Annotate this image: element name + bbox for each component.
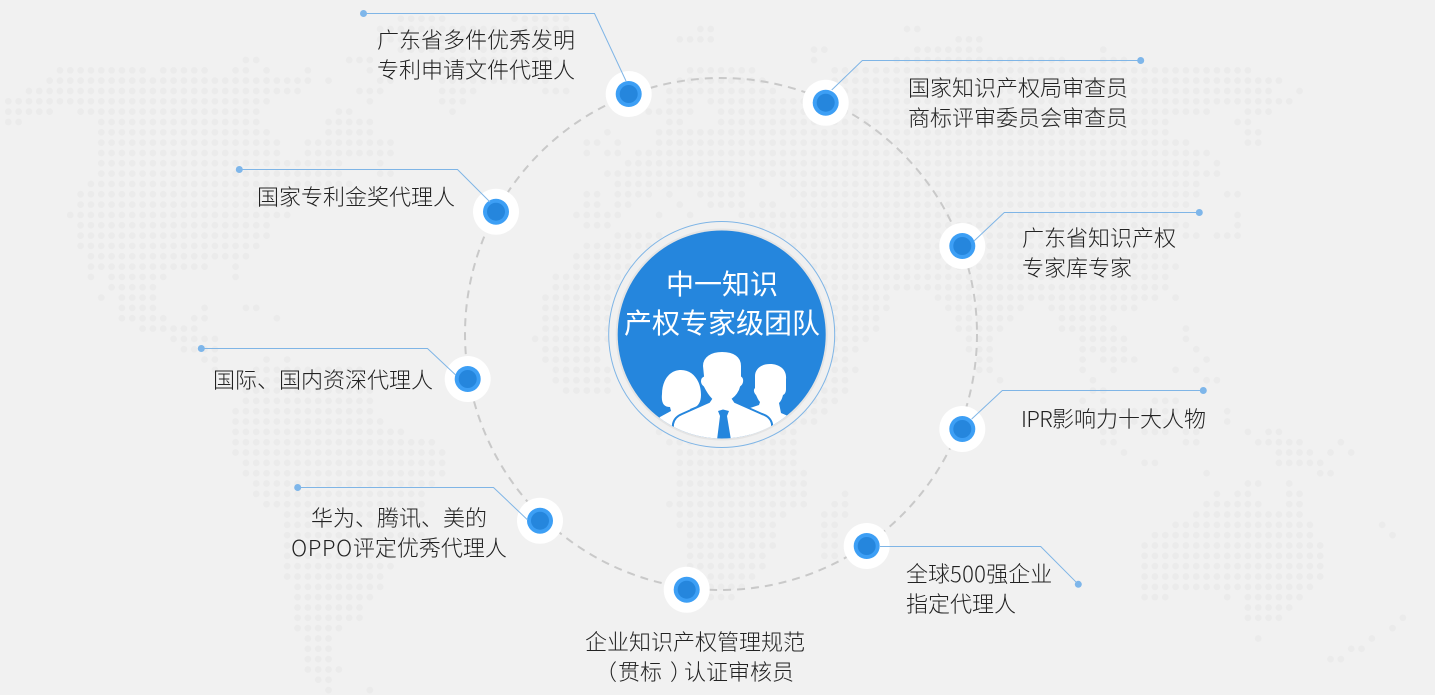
badge subheading: 产权专家级团队 xyxy=(624,308,820,339)
label: CNIPA examiner: 商标评审委员会审查员 xyxy=(908,106,1128,131)
node 5 xyxy=(445,356,491,402)
node 3 xyxy=(473,189,519,235)
badge heading: 中一知识 xyxy=(666,269,778,300)
node 4 xyxy=(939,223,985,269)
label: CNIPA examiner xyxy=(908,76,1128,131)
label: provincial expert xyxy=(1022,226,1176,281)
label: CNIPA examiner: 国家知识产权局审查员 xyxy=(908,76,1128,101)
label: standard auditor: （贯标 ）认证审核员 xyxy=(595,660,794,685)
label: senior agent: 国际、国内资深代理人 xyxy=(213,368,433,393)
label: standard auditor xyxy=(585,630,805,685)
label: invention patent agent: 专利申请文件代理人 xyxy=(377,58,575,83)
label: invention patent agent xyxy=(377,28,575,83)
node 6 xyxy=(939,406,985,452)
label: provincial expert: 专家库专家 xyxy=(1022,256,1132,281)
node 8 xyxy=(844,523,890,569)
icon: three people silhouettes xyxy=(660,352,787,438)
node 7 xyxy=(517,498,563,544)
label: standard auditor: 企业知识产权管理规范 xyxy=(585,630,805,655)
label: excellent agent: 华为、腾讯、美的 xyxy=(311,506,487,531)
label: gold award: 国家专利金奖代理人 xyxy=(257,185,455,210)
label: invention patent agent: 广东省多件优秀发明 xyxy=(377,28,575,53)
label: IPR influence: IPR影响力十大人物 xyxy=(1021,402,1206,434)
node 1 xyxy=(606,71,652,117)
label: provincial expert: 广东省知识产权 xyxy=(1022,226,1176,251)
central team badge xyxy=(608,221,836,448)
node 2 xyxy=(803,80,849,126)
label: Fortune 500: 全球500强企业 xyxy=(906,557,1052,589)
node 9 xyxy=(664,567,710,613)
label: Fortune 500 xyxy=(906,557,1052,617)
label: Fortune 500: 指定代理人 xyxy=(906,592,1016,617)
label: excellent agent xyxy=(291,506,507,563)
label: excellent agent: OPPO评定优秀代理人 xyxy=(291,531,507,563)
